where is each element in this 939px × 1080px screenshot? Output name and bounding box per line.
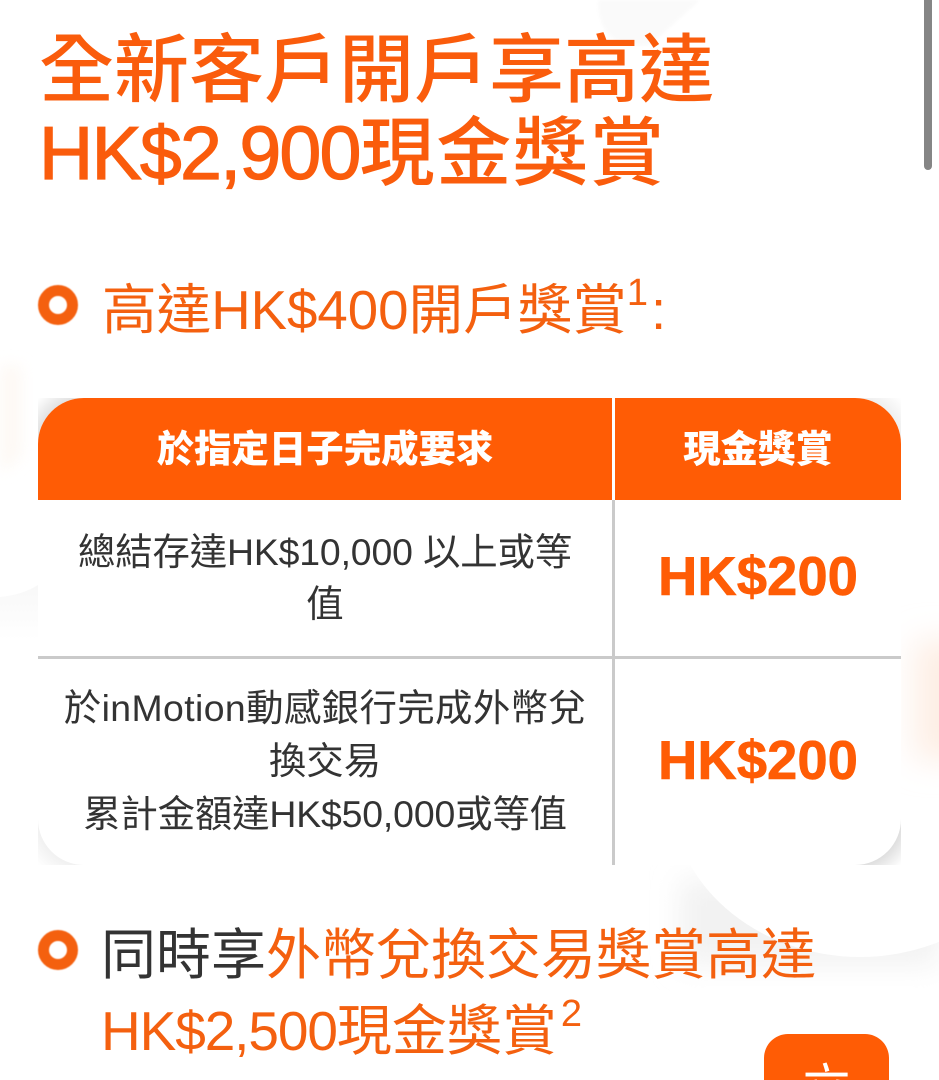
row 1 requirement: 值 bbox=[306, 583, 344, 625]
scrollbar bbox=[924, 0, 932, 170]
button bbox=[764, 1034, 889, 1080]
title: 全新客戶開戶享高達 bbox=[39, 28, 714, 112]
header column divider bbox=[612, 398, 615, 500]
title bbox=[39, 28, 714, 195]
row 2 requirement: 累計金額達HK$50,000或等值 bbox=[83, 793, 567, 835]
panel: reward table bbox=[38, 398, 901, 865]
row 1 requirement bbox=[78, 531, 572, 625]
bullet icon: second heading bbox=[38, 930, 78, 970]
row 2 reward: HK$200 bbox=[658, 730, 858, 791]
heading: FX reward: HK$2,500現金獎賞2 bbox=[101, 993, 582, 1062]
row 1 reward: HK$200 bbox=[658, 546, 858, 607]
row 2 requirement: 換交易 bbox=[269, 740, 381, 782]
row 2 requirement bbox=[64, 687, 586, 835]
row divider bbox=[38, 656, 901, 659]
heading: FX reward: 同時享外幣兌換交易獎賞高達 bbox=[101, 924, 816, 986]
row 1 requirement: 總結存達HK$10,000 以上或等 bbox=[78, 531, 572, 573]
table header row bbox=[38, 398, 901, 500]
heading: account opening reward: 高達HK$400開戶獎賞1: bbox=[102, 272, 666, 341]
row 2 requirement: 於inMotion動感銀行完成外幣兌 bbox=[64, 687, 586, 729]
table header: requirement: 於指定日子完成要求 bbox=[157, 419, 493, 473]
heading: FX reward bbox=[101, 924, 816, 1062]
title: HK$2,900現金獎賞 bbox=[39, 111, 666, 195]
column divider bbox=[612, 500, 615, 865]
table header: cash reward: 現金獎賞 bbox=[683, 419, 833, 473]
bullet icon: first heading bbox=[38, 285, 78, 325]
